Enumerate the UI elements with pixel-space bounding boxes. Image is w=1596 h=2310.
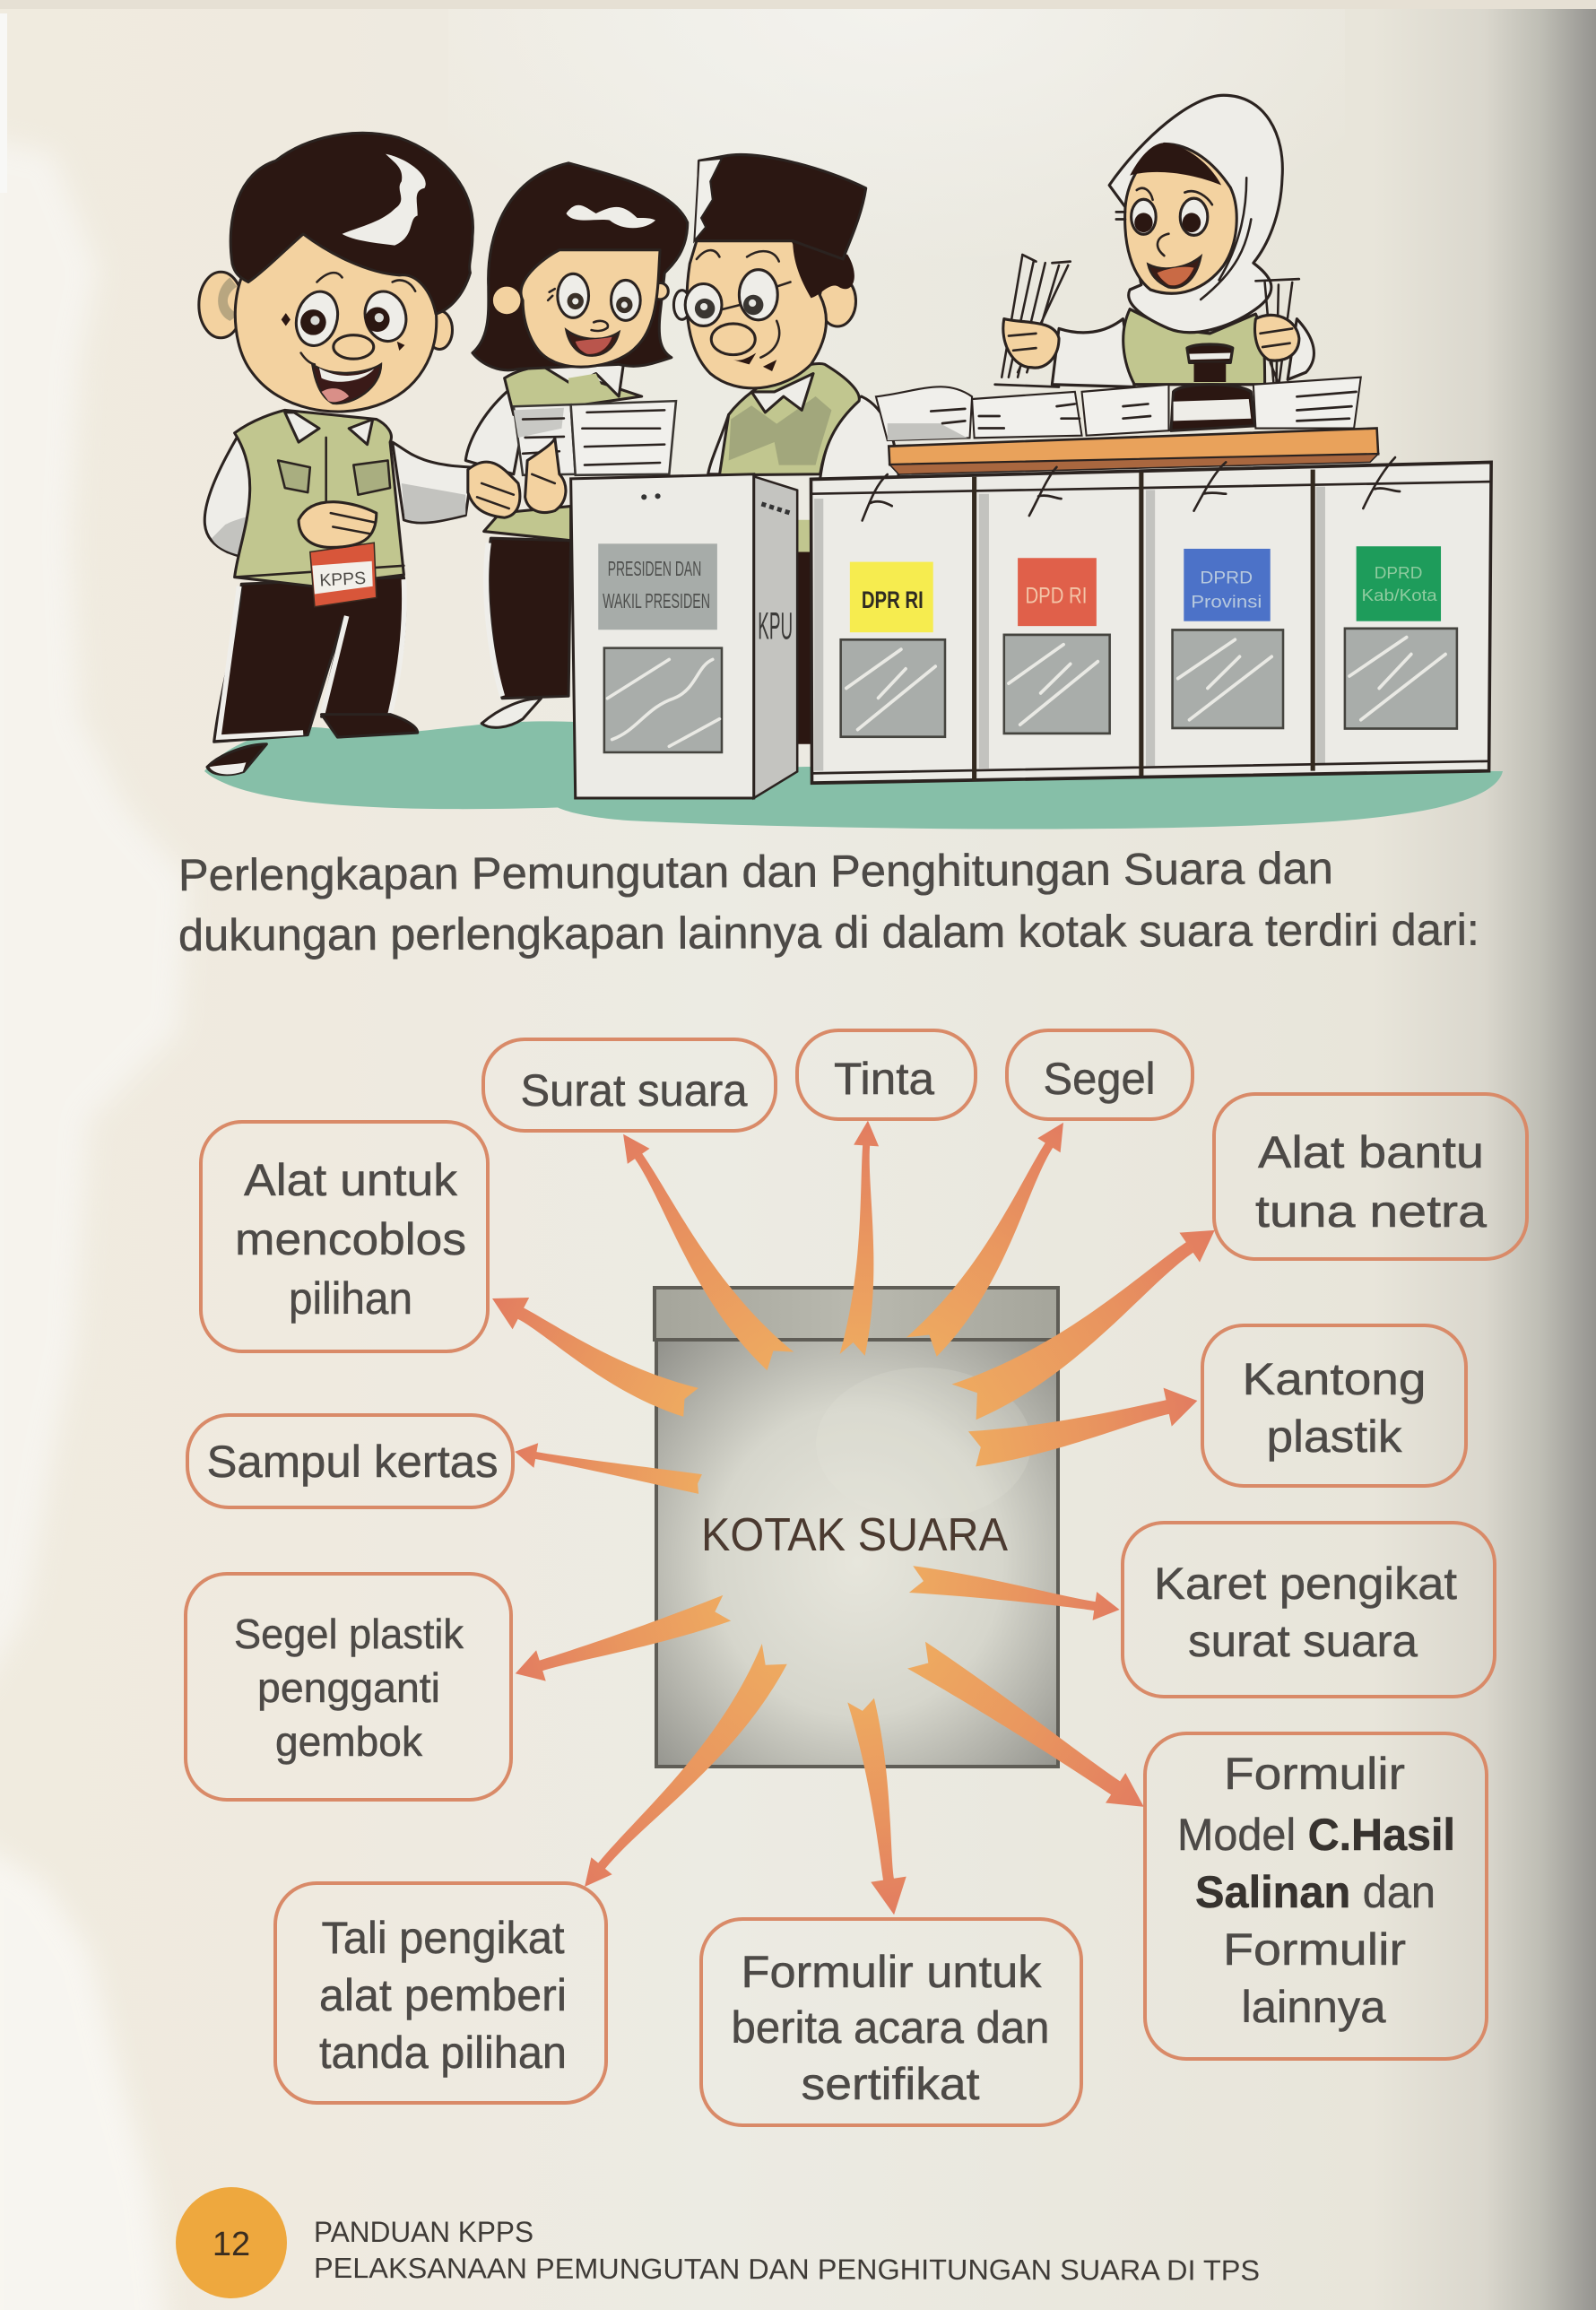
callout: Segel plastik pengganti gembok: pengganti (257, 1664, 440, 1711)
callout: Tinta (797, 1030, 976, 1119)
page number badge (176, 2187, 287, 2298)
callout: Sampul kertas: Sampul kertas (206, 1437, 499, 1487)
arrow to Segel (906, 1113, 1084, 1360)
label: DPD RI (1018, 558, 1097, 626)
callout: Tinta: Tinta (834, 1054, 934, 1104)
callout: Formulir untuk berita acara dan sertifikat: berita acara dan (732, 2002, 1049, 2053)
label: DPRD Provinsi (1184, 549, 1271, 621)
badge: KPPS: KPPS (319, 569, 367, 591)
callout: Alat untuk mencoblos pilihan: Alat untuk (244, 1155, 458, 1205)
callout: Alat untuk mencoblos pilihan: mencoblos (235, 1214, 466, 1264)
callout: Formulir Model C.Hasil Salinan: lainnya (1241, 1982, 1386, 2032)
hand with nails, right (1255, 279, 1299, 389)
callout: Surat suara (483, 1039, 776, 1131)
callout: Formulir Model C.Hasil Salinan: Model C.Hasil (1177, 1810, 1455, 1860)
character: man with peci (673, 155, 898, 483)
arrow to Kantong plastik (967, 1381, 1201, 1468)
callout: Alat bantu tuna netra: Alat bantu (1258, 1127, 1484, 1177)
arrow to Sampul kertas (513, 1439, 702, 1497)
central box: Kotak Suara: KOTAK SUARA (701, 1509, 1008, 1561)
illustration: ground shadow (204, 721, 1503, 829)
callout: Segel plastik pengganti gembok: Segel plastik (234, 1611, 464, 1657)
four ballot boxes body (811, 457, 1491, 783)
callout: Tali pengikat alat pemberi tanda pilihan (275, 1883, 606, 2103)
callout: Formulir untuk berita acara dan sertifikat (701, 1919, 1081, 2125)
label: DPR RI: DPR RI (862, 586, 924, 613)
hand with nails, left (1002, 255, 1071, 378)
callout: Tali pengikat alat pemberi tanda pilihan: Tali pengikat (321, 1913, 565, 1963)
intro paragraph: Perlengkapan Pemungutan dan Penghitungan Suara dan (178, 843, 1333, 900)
callout: Kantong plastik: Kantong (1243, 1354, 1426, 1404)
callout: Alat untuk mencoblos pilihan (201, 1122, 488, 1351)
callout: Kantong plastik (1202, 1325, 1466, 1486)
character: male worker with KPPS badge (199, 133, 566, 775)
callout: Formulir Model C.Hasil Salinan: Salinan dan (1195, 1867, 1436, 1917)
character: woman in hijab (1002, 95, 1314, 389)
callout: Tali pengikat alat pemberi tanda pilihan: alat pemberi (319, 1970, 567, 2020)
callout: Karet pengikat surat suara (1123, 1523, 1495, 1697)
shelf with papers and ink bottle (876, 344, 1378, 474)
callout: Segel plastik pengganti gembok (186, 1574, 511, 1800)
label: DPRD Kab/Kota: Kab/Kota (1362, 586, 1437, 604)
character: woman with paper stack (465, 163, 688, 727)
callout: Formulir Model C.Hasil Salinan: Formulir (1224, 1749, 1405, 1799)
central box: Kotak Suara (655, 1288, 1058, 1767)
ballot box: Presiden dan Wakil Presiden: WAKIL PRESIDEN (603, 589, 710, 612)
callout: Segel plastik pengganti gembok: gembok (275, 1718, 423, 1765)
footer text: PELAKSANAAN PEMUNGUTAN DAN PENGHITUNGAN SUARA DI TPS (314, 2252, 1260, 2287)
windows of four ballot boxes (841, 629, 1457, 737)
page number badge: 12 (213, 2226, 250, 2263)
arrow to Segel plastik (510, 1593, 732, 1689)
intro paragraph: dukungan perlengkapan lainnya di dalam kotak suara terdiri dari: (178, 905, 1479, 960)
illustration: three poll workers (199, 133, 898, 798)
callout: Karet pengikat surat suara: surat suara (1188, 1616, 1418, 1666)
badge: KPPS (310, 543, 377, 607)
arrow to Surat suara (604, 1125, 794, 1375)
callout: Formulir untuk berita acara dan sertifikat: sertifikat (802, 2059, 980, 2109)
ballot box: Presiden dan Wakil Presiden: KPU (758, 604, 793, 647)
illustration: woman with hijab, supplies and four ballot boxes (811, 95, 1491, 783)
paper stack (514, 401, 676, 475)
label: DPRD Kab/Kota (1357, 546, 1441, 621)
arrow to Karet pengikat (909, 1565, 1122, 1624)
arrow to Formulir Model C.Hasil (906, 1640, 1154, 1822)
callout: Kantong plastik: plastik (1266, 1411, 1403, 1462)
label: DPRD Provinsi: Provinsi (1191, 593, 1262, 612)
callout: Segel (1007, 1030, 1193, 1119)
callout: Sampul kertas (187, 1415, 513, 1507)
label: DPRD Kab/Kota: DPRD (1375, 564, 1422, 582)
callout: Alat untuk mencoblos pilihan: pilihan (289, 1273, 412, 1324)
arrow to Alat untuk mencoblos (482, 1282, 699, 1420)
label: DPD RI: DPD RI (1026, 584, 1087, 609)
intro paragraph (178, 843, 1479, 960)
arrow to Tali pengikat (572, 1644, 793, 1901)
footer text: PANDUAN KPPS (314, 2216, 533, 2248)
label: DPRD Provinsi: DPRD (1200, 569, 1253, 588)
callout: Alat bantu tuna netra (1214, 1094, 1527, 1259)
callout: Segel: Segel (1044, 1054, 1155, 1104)
label: DPR RI (850, 562, 933, 632)
ballot box: Presiden dan Wakil Presiden: PRESIDEN DAN (608, 557, 701, 580)
arrows radiating from the box (482, 1113, 1231, 1917)
arrow to Formulir untuk berita acara (843, 1698, 912, 1917)
callout: Karet pengikat surat suara: Karet pengikat (1154, 1559, 1457, 1609)
ballot box: Presiden dan Wakil Presiden (571, 474, 813, 798)
callout: Formulir untuk berita acara dan sertifikat: Formulir untuk (741, 1947, 1043, 1997)
callout: Formulir Model C.Hasil Salinan (1145, 1733, 1487, 2059)
arrow to Alat bantu (951, 1212, 1231, 1425)
footer text (314, 2216, 1260, 2287)
callout: Formulir Model C.Hasil Salinan: Formulir (1223, 1924, 1406, 1975)
callout: Alat bantu tuna netra: tuna netra (1255, 1186, 1487, 1237)
arrow to Tinta (840, 1120, 884, 1356)
callout: Surat suara: Surat suara (520, 1065, 748, 1116)
callout: Tali pengikat alat pemberi tanda pilihan: tanda pilihan (319, 2028, 567, 2078)
